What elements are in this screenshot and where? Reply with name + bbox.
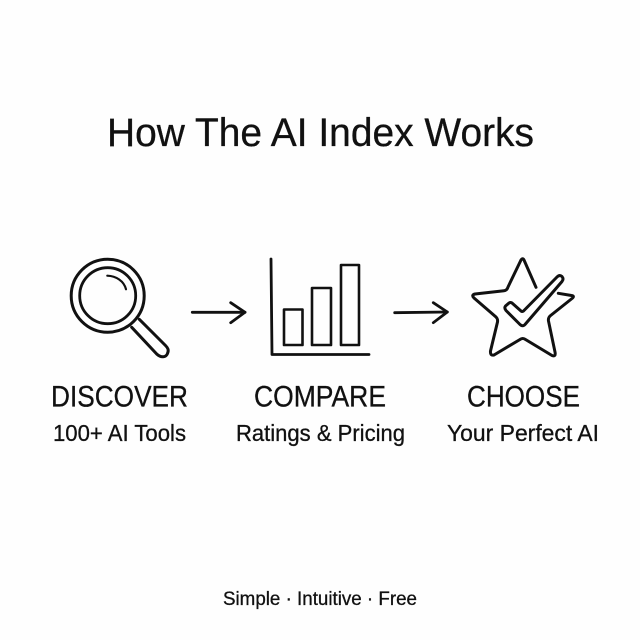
bar: short (284, 310, 302, 345)
title: How The AI Index Works (107, 111, 534, 155)
step: compare (236, 259, 405, 446)
step: choose (447, 259, 599, 446)
bar: tall (341, 265, 359, 345)
icon: star with checkmark (473, 259, 573, 356)
label: choose: CHOOSE (467, 380, 580, 414)
bar: medium (312, 288, 331, 345)
arrow: discover to compare (192, 303, 245, 323)
footer tagline: Simple · Intuitive · Free (223, 589, 417, 610)
label: compare: COMPARE (254, 380, 386, 414)
sublabel: 100+ AI Tools: 100+ AI Tools (53, 420, 186, 446)
sublabel: ratings and pricing: Ratings & Pricing (236, 420, 405, 446)
icon: magnifying glass (71, 259, 168, 357)
step: discover (51, 259, 188, 446)
arrow: compare to choose (395, 303, 447, 323)
label: discover: DISCOVER (51, 380, 188, 414)
sublabel: your perfect AI: Your Perfect AI (447, 420, 599, 446)
icon: bar chart (271, 259, 369, 354)
